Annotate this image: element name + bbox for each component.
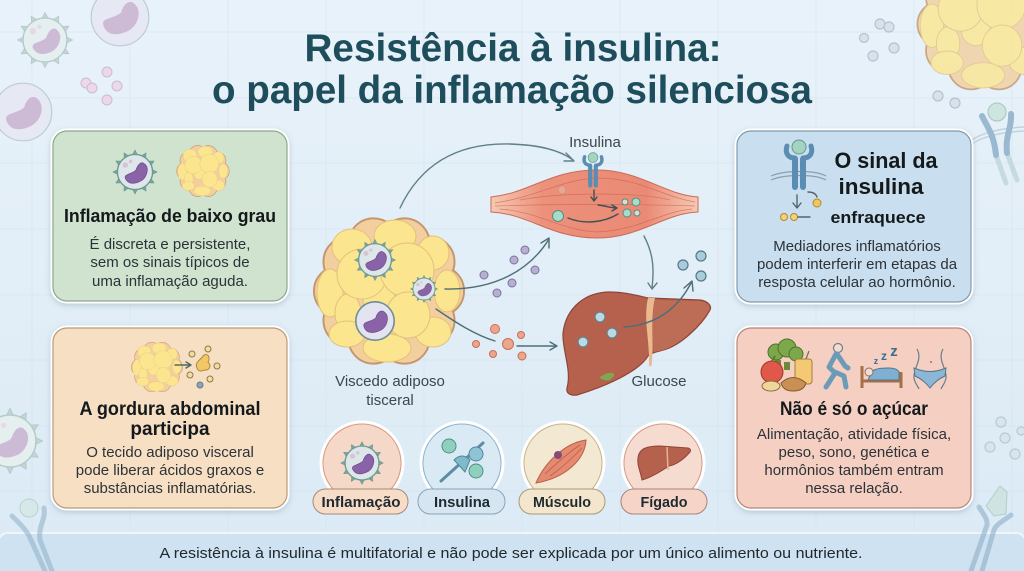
decorative receptor bottom left — [12, 499, 52, 571]
receptor — [584, 153, 602, 188]
body text — [757, 238, 958, 291]
arrow: liver releases glucose — [624, 251, 706, 327]
body text — [757, 426, 951, 497]
badge: músculo — [519, 422, 605, 514]
label: tecido adiposo: tisceral — [366, 392, 414, 409]
heading: A gordura abdominal — [80, 399, 260, 420]
body text: substâncias inflamatórias. — [84, 480, 256, 497]
badge: músculo: Músculo — [533, 494, 591, 511]
icon: fat cluster — [177, 146, 229, 196]
body text: Mediadores inflamatórios — [773, 238, 941, 255]
heading — [80, 399, 260, 440]
title — [212, 27, 813, 112]
panel: inflamação de baixo grau — [53, 131, 287, 301]
immune cell: small — [410, 275, 438, 303]
body text: O tecido adiposo visceral — [86, 444, 254, 461]
icon: insulin receptor — [771, 140, 826, 220]
panel: o sinal da insulina enfraquece — [737, 131, 971, 302]
arrow: fat to insulin — [400, 144, 574, 208]
panel: não é só o açúcar — [737, 328, 971, 508]
immune cell: spiky — [354, 240, 396, 280]
arrow: fat to liver with mediators — [436, 309, 557, 360]
arrow: fat to muscle with mediators — [445, 238, 549, 297]
body text — [76, 444, 264, 497]
title: Resistência à insulina: — [304, 27, 722, 70]
icon: bed and sleep: z — [881, 349, 887, 363]
body text: pode liberar ácidos graxos e — [76, 462, 264, 479]
badge: fígado — [621, 422, 707, 514]
icon: walking person — [826, 344, 848, 387]
heading: Inflamação de baixo grau — [64, 205, 276, 226]
label: tecido adiposo: Viscedo adiposo — [335, 373, 445, 390]
body text: uma inflamação aguda. — [92, 273, 248, 290]
footer bar: A resistência à insulina é multifatorial e não pode ser explicada por um único alimento ou nutriente. — [160, 545, 862, 562]
heading: enfraquece — [830, 208, 926, 227]
icon: bed and sleep: z — [890, 343, 898, 360]
label: Insulina: Insulina — [569, 134, 622, 151]
badge: insulina: Insulina — [434, 494, 491, 511]
body text: Alimentação, atividade física, — [757, 426, 951, 443]
body text: peso, sono, genética e — [779, 444, 929, 461]
icon: bed and sleep: z — [874, 356, 879, 366]
panel: gordura abdominal — [53, 328, 287, 508]
arrow: muscle to liver — [644, 236, 657, 289]
badge: fígado: Fígado — [640, 494, 688, 511]
title: o papel da inflamação silenciosa — [212, 69, 813, 112]
heading: Não é só o açúcar — [780, 399, 929, 420]
icon: food — [761, 339, 812, 391]
footer bar — [0, 533, 1024, 571]
body text: resposta celular ao hormônio. — [758, 274, 956, 291]
heading: insulina — [838, 174, 924, 199]
heading: O sinal da — [834, 148, 938, 173]
badge: insulina — [418, 422, 505, 514]
liver — [563, 292, 711, 395]
immune cell: round — [356, 302, 394, 340]
body text: nessa relação. — [805, 480, 903, 497]
decorative cells top left — [0, 0, 149, 141]
icon: fat releasing particles — [132, 342, 220, 392]
body text: É discreta e persistente, — [90, 236, 250, 253]
icon: immune cell — [113, 150, 157, 194]
decorative fat cluster top right — [860, 0, 1024, 108]
badge: inflamação: Inflamação — [322, 494, 400, 511]
glucose in liver — [578, 312, 617, 347]
icon: bed and sleep — [862, 343, 901, 388]
body text: podem interferir em etapas da — [757, 256, 958, 273]
body text: hormônios também entram — [764, 462, 944, 479]
heading: participa — [130, 419, 210, 440]
icon: waist — [914, 349, 946, 389]
label: tecido adiposo — [335, 373, 445, 409]
badge: inflamação — [313, 422, 408, 514]
inner arrows and glucose — [552, 186, 640, 222]
diagram: visceral fat cluster — [314, 218, 464, 364]
label: Glucose: Glucose — [631, 373, 687, 390]
decorative particles and receptor bottom right — [971, 417, 1024, 571]
body text — [90, 236, 250, 290]
body text: sem os sinais típicos de — [90, 254, 250, 271]
heading — [830, 148, 938, 227]
muscle — [491, 153, 698, 238]
decorative cell bottom left — [0, 408, 43, 474]
decorative receptor right — [972, 103, 1024, 183]
